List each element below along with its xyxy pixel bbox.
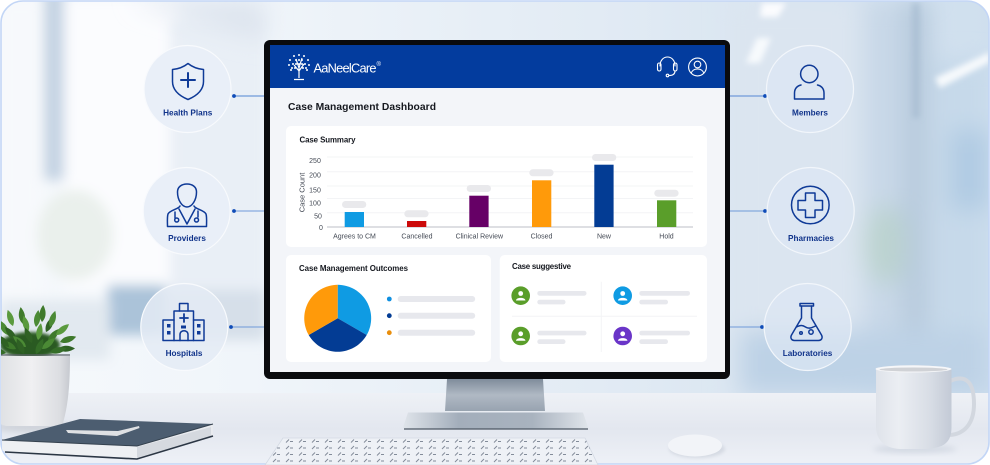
axis title: Case Count	[298, 172, 306, 212]
icon: medical cross	[792, 186, 829, 224]
bar chart	[298, 154, 693, 240]
suggestion: purple bottom	[613, 327, 690, 345]
panel: case management outcomes	[286, 255, 491, 362]
axis labels: 250	[309, 158, 321, 165]
node: Laboratories	[764, 284, 851, 370]
axis labels: 200	[309, 172, 321, 180]
axis labels: 150	[309, 188, 321, 194]
node: Pharmacies	[767, 168, 854, 254]
legend	[387, 296, 475, 336]
suggestion: blue top	[613, 286, 690, 305]
icon: shield	[172, 64, 204, 100]
heading: Case Summary	[300, 136, 356, 144]
logo wordmark: AaNeelCare	[314, 60, 376, 76]
node: Hospitals: Hospitals	[166, 349, 203, 358]
icon: flask	[791, 304, 822, 340]
category labels: New	[597, 233, 612, 240]
axis labels: 0	[319, 225, 323, 232]
screen	[270, 45, 725, 372]
monitor stand	[403, 379, 588, 430]
plant in white pot	[0, 305, 77, 432]
axis labels: 100	[309, 200, 321, 208]
monitor	[264, 40, 730, 379]
header bar	[270, 45, 725, 88]
suggestion: green bottom	[511, 327, 586, 345]
node: Health Plans	[144, 46, 231, 132]
node: Members: Members	[792, 108, 828, 118]
connector lines	[229, 94, 767, 329]
panel: case summary	[286, 126, 707, 247]
category labels	[333, 233, 674, 240]
icon: member	[794, 65, 824, 99]
node: Providers	[143, 168, 230, 254]
node: Members	[766, 46, 854, 132]
heading: Case suggestive	[512, 262, 572, 271]
logo: tree	[288, 54, 310, 80]
keyboard	[265, 438, 598, 465]
dashboard title: Case Management Dashboard	[288, 102, 436, 113]
icon: headset	[658, 57, 677, 77]
node: Providers: Providers	[168, 234, 206, 243]
category labels: Cancelled	[401, 233, 433, 240]
leaves	[0, 305, 77, 358]
coffee mug	[873, 365, 974, 453]
monitor bezel	[264, 40, 730, 379]
notebook with pen	[2, 419, 213, 459]
axis labels: 50	[314, 214, 322, 220]
panel: case suggestive	[500, 255, 707, 362]
suggestion: green top	[511, 286, 586, 305]
icon: user profile	[689, 58, 706, 76]
pot	[0, 356, 70, 426]
heading: Case Management Outcomes	[299, 264, 409, 273]
icon: doctor	[167, 184, 207, 226]
mouse	[668, 434, 725, 458]
category labels: Agrees to CM	[333, 233, 376, 240]
icon: hospital	[163, 304, 204, 340]
pie chart	[304, 285, 371, 352]
category labels: Closed	[531, 233, 552, 240]
node: Health Plans: Health Plans	[163, 108, 213, 118]
header bar: ®	[376, 61, 382, 68]
value placeholders	[342, 154, 679, 217]
bars	[345, 165, 676, 227]
node: Pharmacies: Pharmacies	[788, 234, 834, 243]
node: Laboratories: Laboratories	[783, 349, 833, 358]
desk	[0, 393, 990, 465]
category labels: Clinical Review	[456, 233, 504, 240]
axis labels	[309, 158, 323, 232]
category labels: Hold	[659, 233, 674, 240]
node: Hospitals	[141, 284, 228, 370]
